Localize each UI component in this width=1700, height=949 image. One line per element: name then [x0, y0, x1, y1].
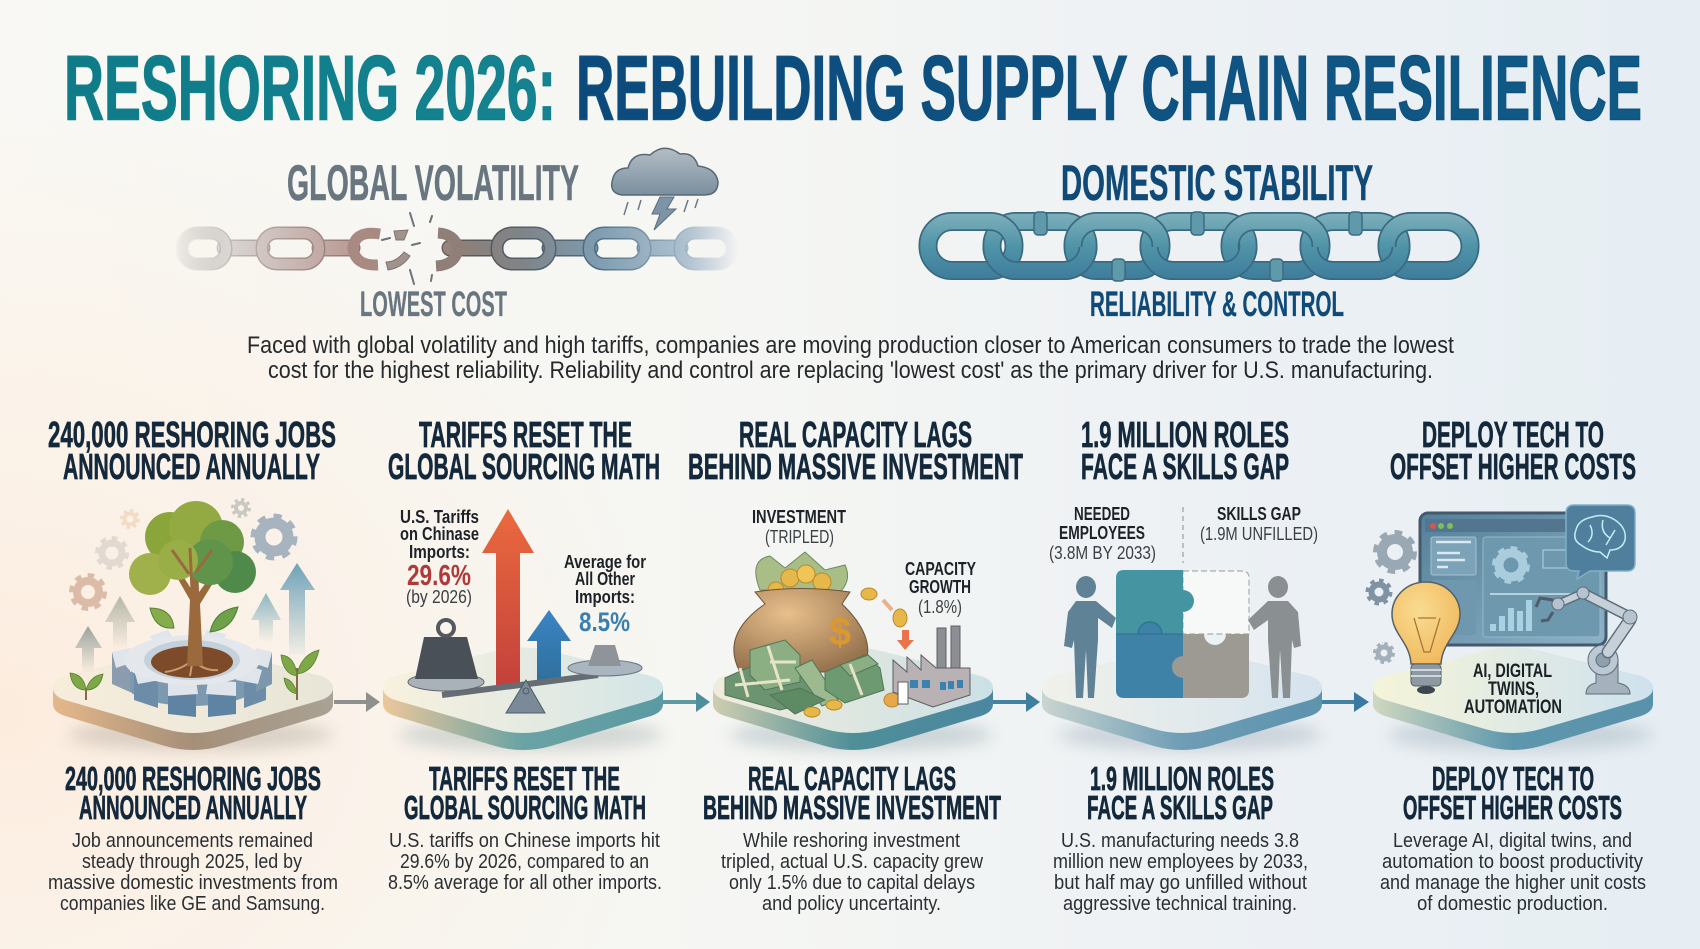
label: skills gap [1200, 504, 1318, 544]
title [64, 38, 1642, 140]
heading: lower tariffs reset: TARIFFS RESET THE [429, 760, 620, 797]
heading: lower real capacity: REAL CAPACITY LAGS [748, 760, 956, 797]
heading: 1.9 million roles: 1.9 MILLION ROLES [1081, 414, 1289, 455]
arrow: step 2 to 3 [662, 692, 710, 712]
panel: step 2 tariffs [383, 414, 663, 894]
heading: tariffs reset: GLOBAL SOURCING MATH [388, 446, 660, 487]
heading: real capacity lags: REAL CAPACITY LAGS [739, 414, 972, 455]
icon: person left [1064, 576, 1116, 698]
heading: 240,000 reshoring jobs [48, 414, 336, 487]
panel: global volatility [182, 148, 732, 324]
panel: domestic stability [928, 155, 1470, 324]
intro paragraph [247, 332, 1454, 384]
label: investment [752, 507, 846, 547]
arrow: step 3 to 4 [992, 692, 1040, 712]
text: step 2 body: 29.6% by 2026, compared to an [400, 851, 649, 873]
label: skills gap: SKILLS GAP [1217, 504, 1301, 524]
heading: 1.9 million roles [1081, 414, 1289, 487]
text: step 1 body: steady through 2025, led by [82, 851, 302, 873]
icon: small gears [72, 500, 294, 608]
icon: red arrow [482, 509, 534, 685]
text: step 4 body [1053, 830, 1308, 915]
text: step 1 body: companies like GE and Samsung. [60, 893, 325, 915]
text: step 5 body: of domestic production. [1417, 893, 1608, 915]
text: step 4 body: million new employees by 2033, [1053, 851, 1308, 873]
text: step 3 body [721, 830, 983, 915]
icon: brain bubble [1566, 505, 1635, 579]
icon: platform [1373, 648, 1653, 751]
icon: person right [1248, 576, 1301, 698]
heading: lower 240,000 reshoring jobs [65, 760, 321, 826]
heading: lower real capacity: BEHIND MASSIVE INVESTMENT [703, 789, 1001, 826]
icon: puzzle [1116, 570, 1249, 698]
label: ai digital twins automation [1464, 661, 1562, 718]
icon: platform [1042, 648, 1322, 751]
text: step 4 body: U.S. manufacturing needs 3.8 [1061, 830, 1299, 852]
panel: step 4 skills [1042, 414, 1322, 915]
icon: large gear with soil [112, 630, 272, 717]
label: chinese tariffs [400, 507, 479, 607]
heading: tariffs reset: TARIFFS RESET THE [419, 414, 632, 455]
heading: lower 1.9 million: FACE A SKILLS GAP [1087, 789, 1273, 826]
label: chinese tariffs: (by 2026) [406, 587, 472, 607]
icon: storm cloud [612, 148, 718, 230]
label: lowest cost: LOWEST COST [360, 285, 507, 324]
label: needed employees: NEEDED [1074, 504, 1130, 524]
heading: lower 1.9 million: 1.9 MILLION ROLES [1090, 760, 1274, 797]
label: needed employees: (3.8M BY 2033) [1049, 543, 1156, 563]
heading: lower 1.9 million [1087, 760, 1274, 826]
icon: money bag [734, 552, 868, 672]
icon: tilted scale [408, 620, 642, 713]
heading: lower tariffs reset [404, 760, 646, 826]
label: needed employees [1049, 504, 1156, 563]
icon: gears [1368, 533, 1414, 662]
label: investment: INVESTMENT [752, 507, 846, 527]
text: step 5 body: and manage the higher unit costs [1380, 872, 1646, 894]
label: other imports: All Other [575, 569, 635, 589]
arrow: step 4 to 5 [1322, 692, 1369, 712]
text: step 2 body: U.S. tariffs on Chinese imports hit [389, 830, 660, 852]
label: ai digital twins automation: AI, DIGITAL [1473, 661, 1552, 682]
panel: step 3 capacity [688, 414, 1023, 915]
heading: deploy tech [1390, 414, 1636, 487]
arrow: step 1 to 2 [334, 692, 380, 712]
icon: light bulb [1392, 582, 1460, 694]
icon: platform [53, 648, 333, 751]
icon: platform [383, 648, 663, 751]
intro paragraph: Faced with global volatility and high tariffs, companies are moving production closer to American consumers to trade the lowest [247, 332, 1454, 359]
label: capacity growth: (1.8%) [918, 597, 962, 617]
icon: cash stacks [725, 640, 884, 714]
title: RESHORING 2026: [64, 38, 556, 140]
icon: falling coins [804, 588, 914, 717]
label: chinese tariffs: U.S. Tariffs [400, 507, 479, 527]
label: other imports: 8.5% [579, 607, 630, 637]
heading: lower deploy tech [1403, 760, 1622, 826]
text: step 1 body: massive domestic investments from [48, 872, 338, 894]
text: step 3 body: and policy uncertainty. [762, 893, 941, 915]
label: ai digital twins automation: AUTOMATION [1464, 697, 1562, 718]
icon: rising arrows [75, 563, 315, 673]
label: other imports: Average for [564, 552, 646, 572]
heading: 240,000 reshoring jobs: ANNOUNCED ANNUALLY [63, 446, 320, 487]
label: other imports: Imports: [575, 587, 635, 607]
label: capacity growth: CAPACITY [905, 559, 976, 579]
heading: lower 240,000 reshoring jobs: ANNOUNCED ANNUALLY [79, 789, 307, 826]
panel: step 5 tech [1368, 414, 1653, 915]
label: other imports [564, 552, 646, 637]
panel: step 1 jobs [48, 414, 338, 915]
label: capacity growth: GROWTH [909, 577, 971, 597]
heading: lower tariffs reset: GLOBAL SOURCING MATH [404, 789, 646, 826]
icon: robot arm [1536, 587, 1637, 694]
text: step 3 body: tripled, actual U.S. capacity grew [721, 851, 983, 873]
text: step 3 body: While reshoring investment [743, 830, 960, 852]
text: step 2 body: 8.5% average for all other imports. [388, 872, 662, 894]
broken chain [182, 213, 732, 284]
heading: lower 240,000 reshoring jobs: 240,000 RESHORING JOBS [65, 760, 321, 797]
icon: tree [129, 501, 256, 666]
heading: domestic stability: DOMESTIC STABILITY [1061, 155, 1373, 211]
text: step 1 body: Job announcements remained [72, 830, 313, 852]
label: needed employees: EMPLOYEES [1059, 523, 1145, 543]
label: investment: (TRIPLED) [765, 527, 834, 547]
text: step 1 body [48, 830, 338, 915]
label: chinese tariffs: Imports: [409, 542, 470, 562]
heading: lower real capacity [703, 760, 1001, 826]
heading: global volatility: GLOBAL VOLATILITY [287, 155, 579, 211]
icon: money bag: $ [829, 610, 851, 654]
divider: dashed line [1182, 507, 1184, 563]
text: step 4 body: aggressive technical training. [1063, 893, 1297, 915]
text: step 4 body: but half may go unfilled without [1054, 872, 1307, 894]
heading: tariffs reset [388, 414, 660, 487]
heading: 1.9 million roles: FACE A SKILLS GAP [1081, 446, 1289, 487]
label: capacity growth [905, 559, 976, 617]
heading: 240,000 reshoring jobs: 240,000 RESHORING JOBS [48, 414, 336, 455]
strong chain [928, 212, 1470, 281]
text: step 3 body: only 1.5% due to capital delays [729, 872, 975, 894]
label: skills gap: (1.9M UNFILLED) [1200, 524, 1318, 544]
icon: platform [713, 648, 993, 751]
text: step 5 body: Leverage AI, digital twins, and [1393, 830, 1632, 852]
label: reliability and control: RELIABILITY & CONTROL [1090, 285, 1344, 324]
label: chinese tariffs: 29.6% [407, 560, 471, 592]
icon: factory [893, 626, 970, 707]
label: ai digital twins automation: TWINS, [1488, 679, 1539, 700]
heading: real capacity lags [688, 414, 1023, 487]
icon: sprouts [70, 650, 319, 700]
icon: blue arrow [527, 610, 571, 682]
label: chinese tariffs: on Chinase [400, 524, 479, 544]
text: step 5 body: automation to boost productivity [1382, 851, 1643, 873]
intro paragraph: cost for the highest reliability. Reliability and control are replacing 'lowest cost' as the primary driver for U.S. manufacturing. [268, 357, 1433, 384]
text: step 2 body [388, 830, 662, 894]
heading: real capacity lags: BEHIND MASSIVE INVESTMENT [688, 446, 1023, 487]
text: step 5 body [1380, 830, 1646, 915]
icon: monitor [1420, 513, 1606, 645]
